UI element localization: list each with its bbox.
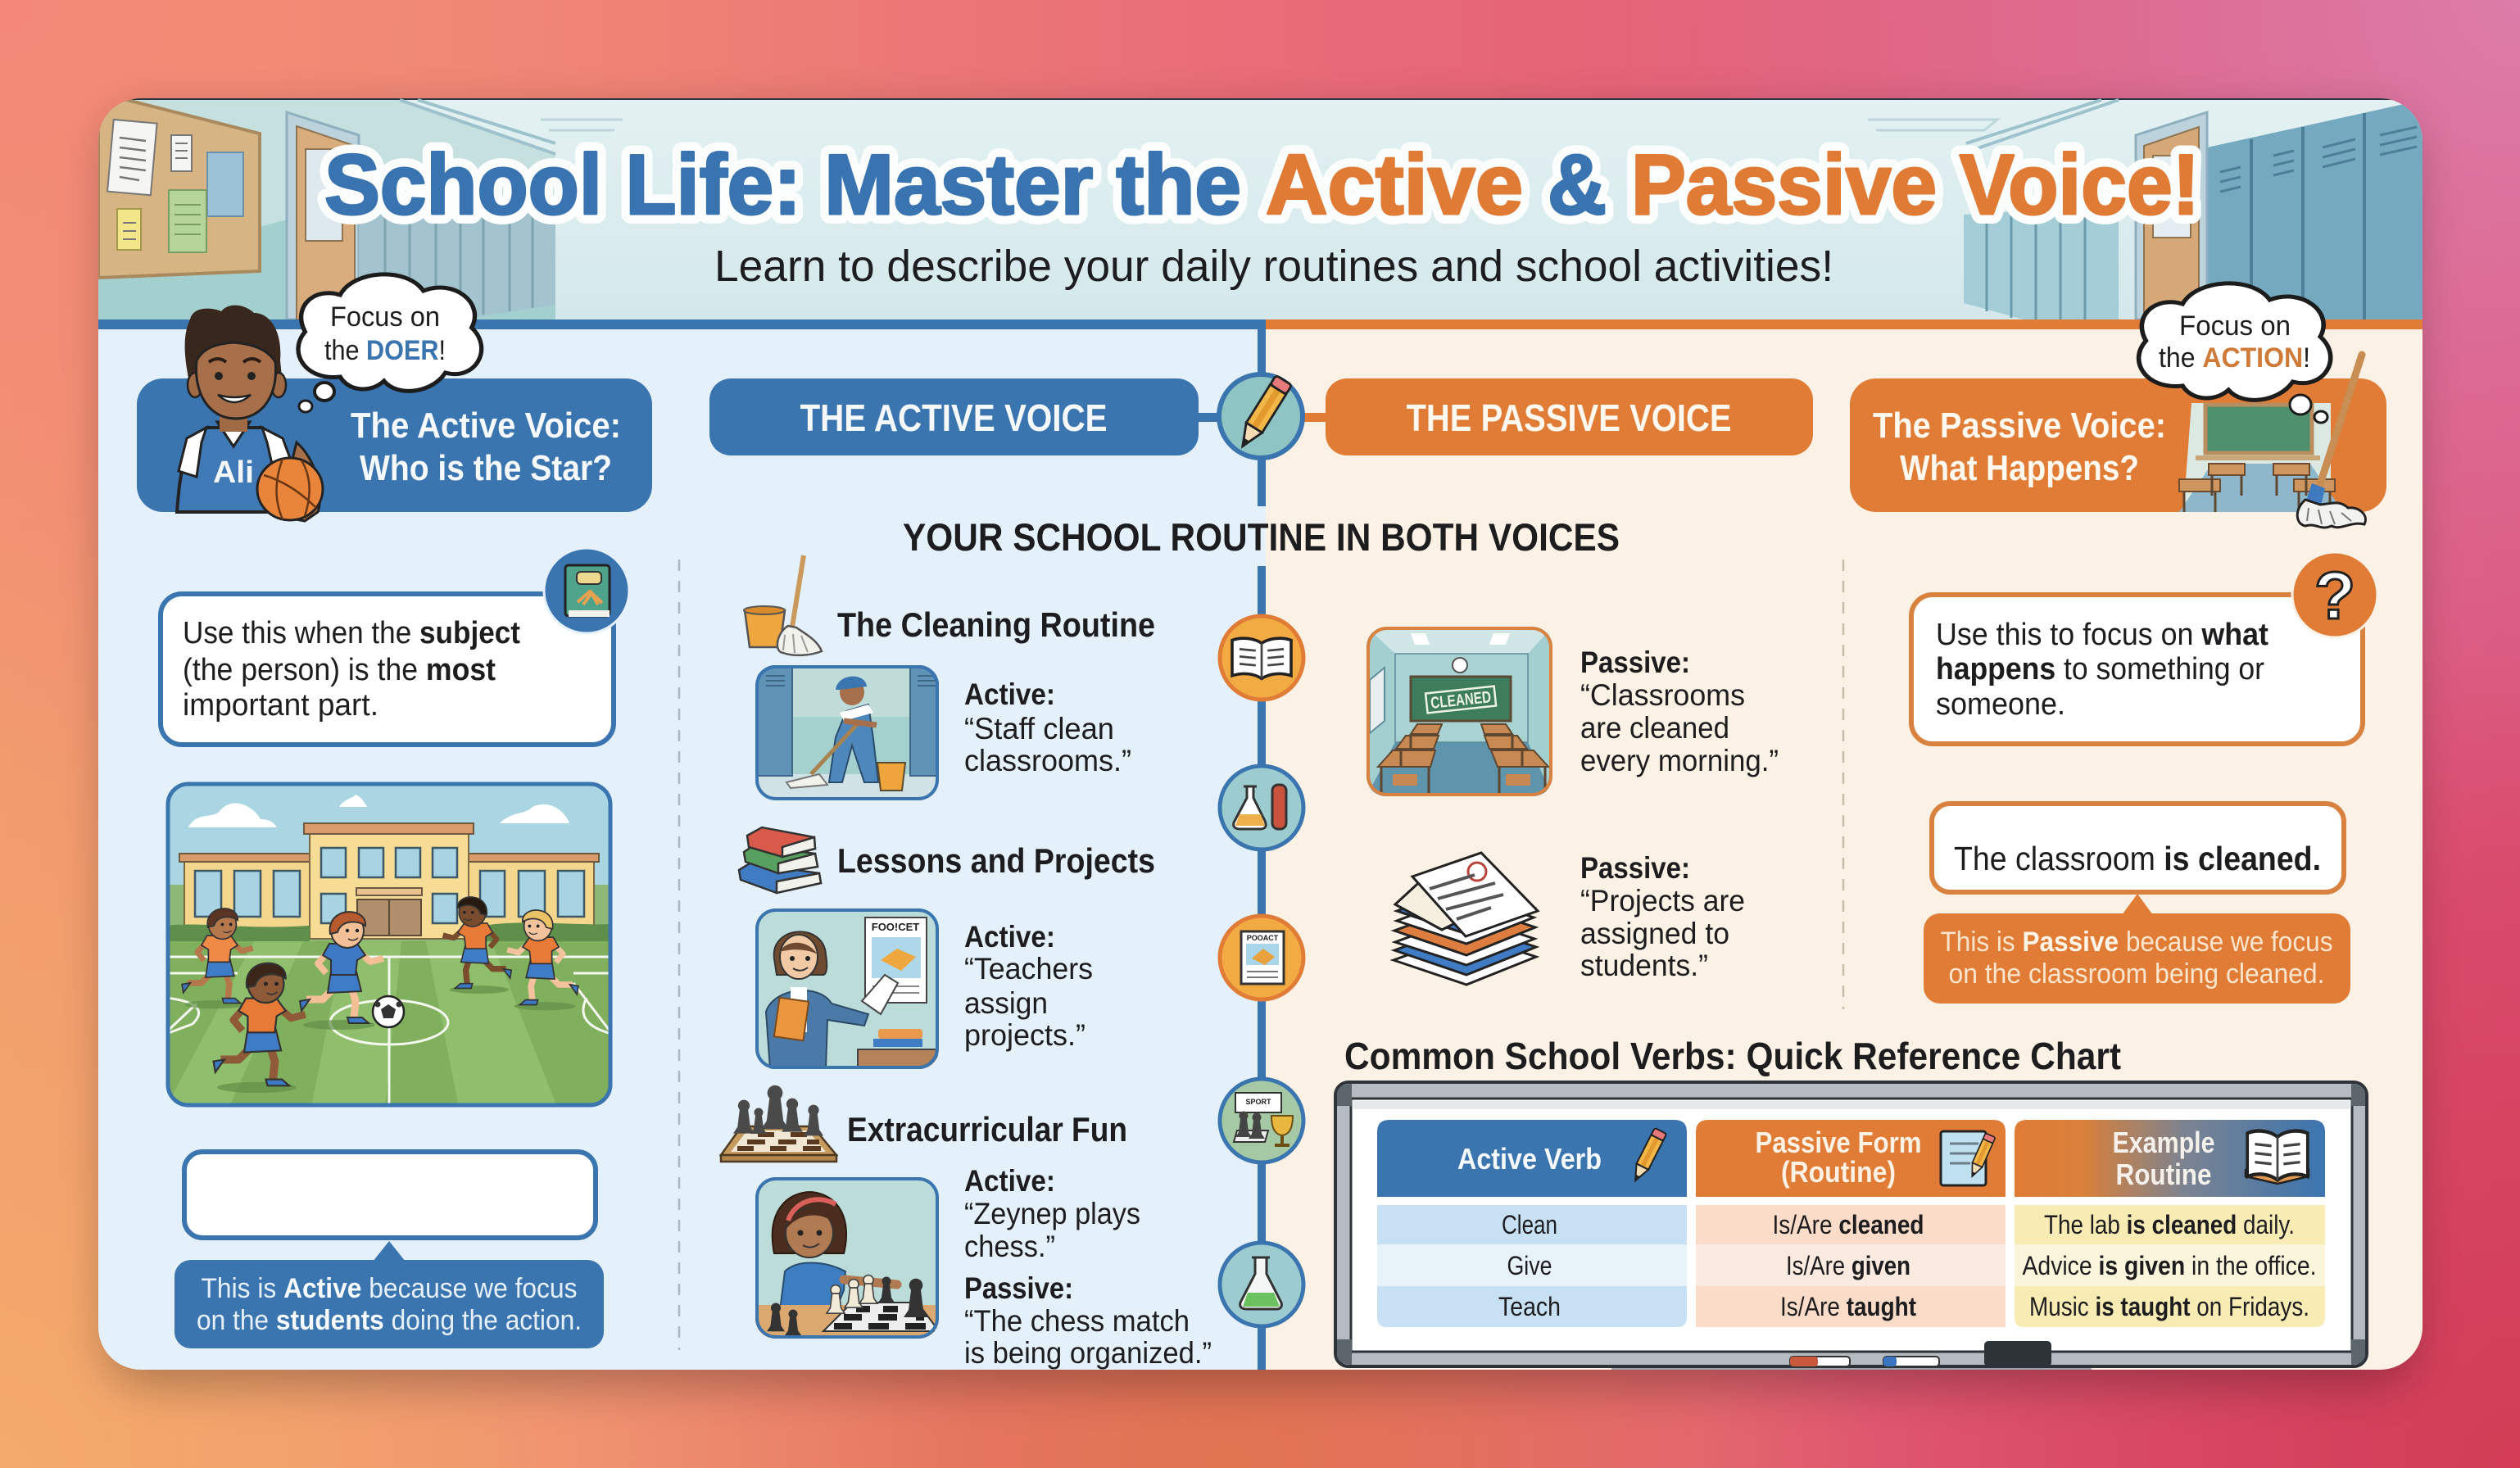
whiteboard reference chart — [1335, 1082, 2367, 1370]
passive explanation callout: This is Passive because we focus — [1940, 927, 2333, 958]
icon: stack of project papers — [1394, 853, 1538, 985]
column cells: passive forms: Is/Are cleaned — [1773, 1210, 1924, 1239]
text: active cleaning — [964, 677, 1131, 777]
icon: science flask node — [1220, 766, 1303, 850]
thought bubble: focus on the doer — [298, 274, 482, 412]
text: chess voices: “The chess match — [964, 1304, 1190, 1338]
column cells: example routines — [2015, 1205, 2325, 1327]
character: Ali with basketball — [177, 306, 323, 521]
text: passive classrooms: Passive: — [1580, 646, 1690, 679]
text: passive classrooms: every morning.” — [1580, 744, 1779, 777]
active explanation callout — [174, 1241, 604, 1348]
illustration: teacher with project: FOO!CET — [872, 921, 919, 933]
dashed column dividers — [678, 560, 680, 1350]
column cells: active verbs — [1377, 1205, 1687, 1327]
illustration: girl playing chess — [755, 1177, 939, 1339]
column header: example routine — [2015, 1120, 2325, 1197]
icon: mop and bucket — [744, 555, 822, 655]
passive usage text: happens to something or — [1936, 652, 2264, 686]
active explanation callout: This is Active because we focus — [202, 1273, 577, 1304]
column header: passive form — [1696, 1120, 2006, 1197]
text: chess voices: Passive: — [964, 1271, 1073, 1305]
icon: green book — [544, 548, 629, 633]
header hallway illustration — [98, 97, 2423, 319]
subtitle: Learn to describe your daily routines and school activities! — [714, 242, 1833, 291]
active header text: The Active Voice: — [351, 406, 621, 446]
thought bubble: focus on the action — [2139, 283, 2331, 423]
column header: passive form: Passive Form — [1755, 1126, 1922, 1159]
text: active lessons: Active: — [964, 920, 1055, 954]
title: & — [1548, 138, 1607, 233]
column cells: active verbs: Teach — [1498, 1292, 1561, 1321]
text: active cleaning: “Staff clean — [964, 712, 1114, 745]
routine: extracurricular heading: Extracurricular Fun — [847, 1110, 1127, 1149]
icon: book stack — [739, 827, 821, 893]
routine: cleaning heading — [744, 555, 1155, 655]
text: passive classrooms: are cleaned — [1580, 711, 1729, 745]
classroom illustration — [2179, 403, 2343, 512]
icon: pencil hub — [1219, 374, 1303, 458]
title: School Life: Master the — [324, 138, 1241, 233]
passive header text — [1873, 406, 2166, 488]
active usage text — [183, 616, 520, 723]
active header text: Who is the Star? — [360, 448, 612, 488]
title — [324, 138, 2200, 233]
text: active lessons: projects.” — [964, 1018, 1086, 1052]
text: active lessons — [964, 920, 1093, 1052]
panel: passive side background — [1266, 328, 2423, 1370]
icon: chessboard — [721, 1085, 836, 1162]
jersey name: Ali — [213, 455, 254, 490]
illustration: cleaned classroom — [1367, 627, 1552, 796]
passive voice banner — [1326, 378, 1813, 455]
passive explanation callout: on the classroom being cleaned. — [1948, 958, 2325, 990]
active voice banner — [709, 378, 1199, 455]
active explanation callout: on the students doing the action. — [197, 1305, 582, 1336]
panel: active side background — [98, 328, 1266, 1370]
title: School Life: Master the — [324, 138, 1241, 233]
column cells: passive forms: Is/Are taught — [1780, 1292, 1916, 1321]
active usage text: important part. — [183, 688, 378, 723]
illustration: staff cleaning — [755, 665, 939, 800]
icon: project node: POOACT — [1247, 934, 1279, 942]
title: Passive Voice! — [1631, 138, 2200, 233]
passive example box — [1932, 804, 2344, 892]
icon: question mark — [2292, 552, 2377, 637]
icon: chess trophy node — [1220, 1079, 1303, 1162]
column cells: example routines: Music is taught on Fridays. — [2029, 1292, 2309, 1321]
title: Active — [1266, 138, 1523, 233]
text: passive classrooms: “Classrooms — [1580, 678, 1745, 712]
whiteboard frame — [1335, 1082, 2367, 1370]
routine: extracurricular heading — [721, 1085, 1127, 1162]
text: active lessons: “Teachers — [964, 952, 1093, 985]
active usage text: Use this when the subject — [183, 616, 520, 650]
thought bubble: focus on the doer: the DOER! — [324, 335, 446, 366]
text: chess voices: chess.” — [964, 1230, 1055, 1263]
passive header text: The Passive Voice: — [1873, 406, 2166, 446]
column cells: active verbs: Clean — [1502, 1210, 1557, 1239]
text: passive projects: “Projects are — [1580, 884, 1745, 918]
passive usage text — [1936, 618, 2268, 722]
callout: when to use passive — [1911, 552, 2377, 744]
title: Passive Voice! — [1631, 138, 2200, 233]
active usage text: (the person) is the most — [183, 653, 496, 687]
icon: project node — [1220, 916, 1303, 999]
chart heading: Common School Verbs: Quick Reference Chart — [1344, 1035, 2121, 1077]
passive example box: The classroom is cleaned. — [1954, 840, 2321, 877]
column header: example routine: Routine — [2115, 1158, 2212, 1191]
passive explanation callout — [1924, 894, 2350, 1004]
section heading: YOUR SCHOOL ROUTINE IN BOTH VOICES — [903, 515, 1620, 559]
text: chess voices — [964, 1164, 1212, 1370]
column cells: active verbs: Give — [1507, 1251, 1552, 1280]
column cells: example routines: The lab is cleaned daily. — [2044, 1210, 2295, 1239]
blue divider band — [98, 319, 1266, 329]
text: passive projects: Passive: — [1580, 851, 1690, 885]
passive usage text: Use this to focus on what — [1936, 618, 2268, 652]
text: chess voices: “Zeynep plays — [964, 1197, 1140, 1230]
routine: cleaning heading: The Cleaning Routine — [837, 605, 1155, 644]
active header text — [351, 406, 621, 488]
routine: lessons heading — [739, 827, 1155, 893]
text: chess voices: Active: — [964, 1164, 1055, 1198]
text: passive projects: students.” — [1580, 949, 1708, 982]
central vertical timeline — [1199, 329, 1327, 1370]
routine: lessons heading: Lessons and Projects — [837, 841, 1155, 880]
active voice header pill — [137, 378, 652, 512]
column header: active verb: Active Verb — [1457, 1142, 1602, 1176]
icon: open book node — [1220, 616, 1303, 700]
column cells: passive forms: Is/Are given — [1786, 1251, 1910, 1280]
title: & — [1548, 138, 1607, 233]
column header: passive form: (Routine) — [1781, 1155, 1896, 1189]
illustration: students playing soccer — [166, 782, 612, 1107]
illustration: cleaned classroom: CLEANED — [1430, 688, 1492, 713]
passive header text: What Happens? — [1900, 448, 2139, 488]
text: active lessons: assign — [964, 986, 1048, 1020]
passive voice banner: THE PASSIVE VOICE — [1406, 396, 1732, 439]
icon: question mark: ? — [2314, 559, 2355, 633]
text: passive classrooms — [1580, 646, 1779, 777]
icon: green flask node — [1220, 1243, 1303, 1326]
text: active cleaning: classrooms.” — [964, 744, 1131, 777]
thought bubble: focus on the doer: Focus on — [330, 301, 440, 333]
callout: when to use active — [161, 548, 629, 745]
title: Active — [1266, 138, 1523, 233]
icon: chess trophy node: SPORT — [1245, 1098, 1271, 1106]
column cells: passive forms — [1696, 1205, 2006, 1327]
thought bubble: focus on the action: Focus on — [2179, 310, 2291, 342]
passive voice header pill — [1850, 378, 2386, 512]
column header: example routine: Example — [2112, 1126, 2215, 1159]
text: passive projects — [1580, 851, 1745, 982]
thought bubble: focus on the action: the ACTION! — [2159, 342, 2310, 374]
text: passive projects: assigned to — [1580, 917, 1729, 950]
passive usage text: someone. — [1936, 687, 2065, 722]
text: chess voices: is being organized.” — [964, 1336, 1212, 1370]
active voice banner: THE ACTIVE VOICE — [800, 396, 1108, 439]
illustration: teacher with project — [755, 908, 939, 1069]
active example box (blank) — [184, 1152, 596, 1238]
icon: mop — [2297, 355, 2365, 528]
column cells: example routines: Advice is given in the office. — [2022, 1251, 2317, 1280]
column header: active verb — [1377, 1120, 1687, 1197]
text: active cleaning: Active: — [964, 677, 1055, 711]
infographic card — [98, 97, 2423, 1370]
orange divider band — [1266, 319, 2423, 329]
